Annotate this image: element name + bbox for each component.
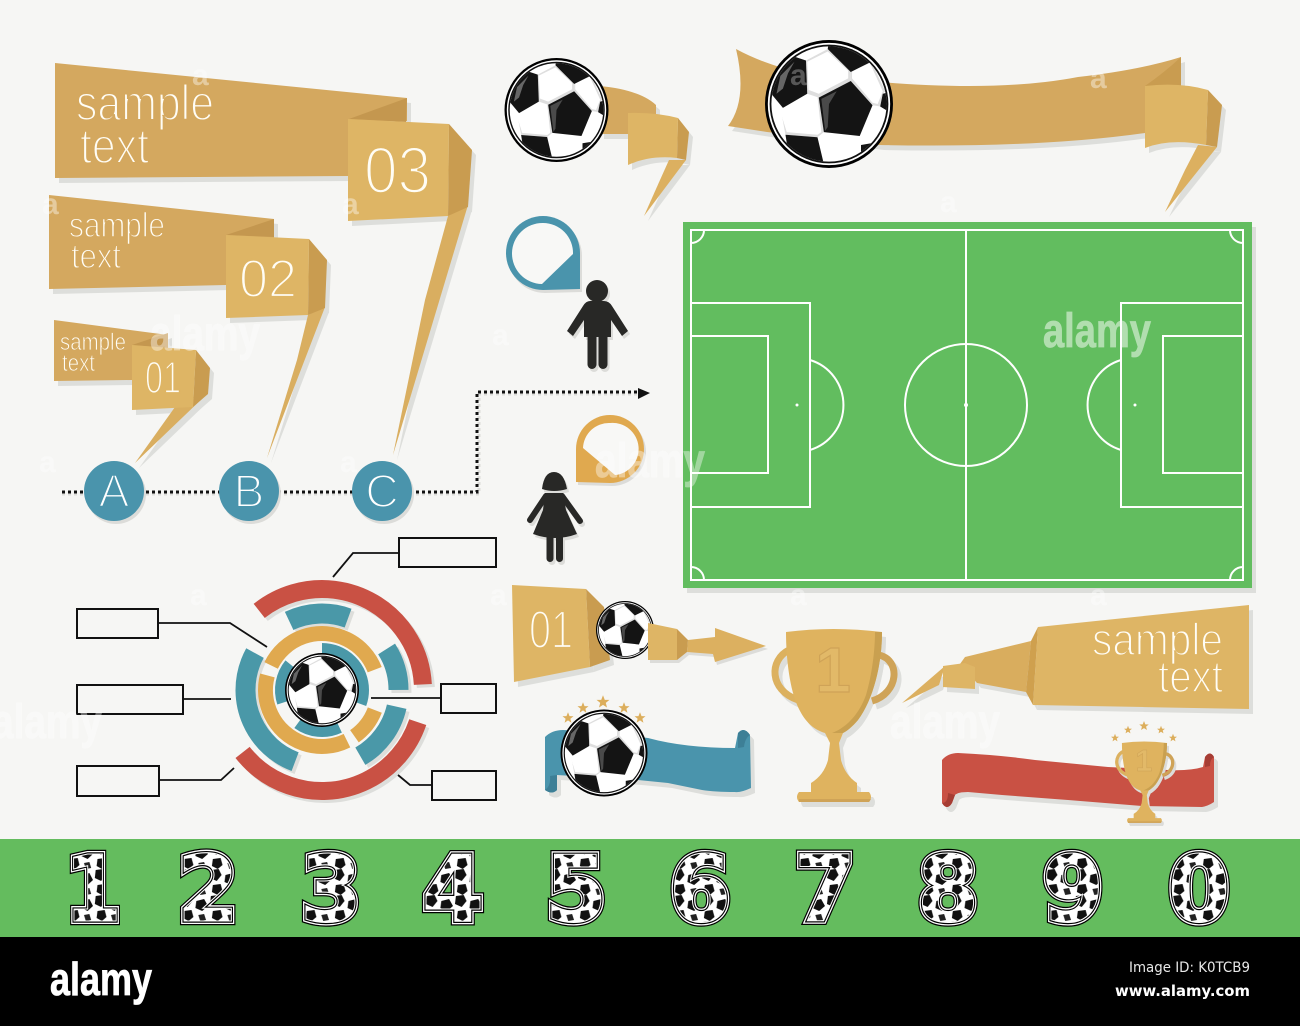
watermarks: alamy (1043, 305, 1151, 358)
digit 5: 5 (545, 837, 607, 943)
icon: soccer ball (560, 710, 648, 796)
timeline node C: C (365, 465, 399, 517)
icon: soccer ball (596, 601, 654, 659)
digit 8: 8 (917, 837, 979, 943)
digit 3: 3 (300, 837, 362, 943)
ribbon: red with trophy (942, 721, 1214, 823)
digit 4: 4 (422, 837, 484, 943)
text: sample text medium (69, 206, 165, 276)
banner: 02 sample text (49, 195, 327, 458)
banner: 03 sample text (55, 63, 472, 455)
digit 7: 7 (794, 837, 856, 943)
digit 1: 1 (64, 836, 122, 943)
timeline node A (84, 461, 144, 521)
callout box: left 2 (77, 685, 231, 714)
digit 2: 2 (177, 837, 239, 943)
watermarks: a (190, 579, 207, 612)
text: sample text right (1092, 614, 1223, 702)
callout box: right 1 (371, 684, 496, 713)
digit 2: 2 (177, 837, 239, 943)
footer logo: alamy (50, 953, 152, 1005)
digit 8: 8 (917, 837, 979, 943)
icon: male figure (567, 280, 628, 369)
digit 0: 0 (1168, 837, 1230, 943)
text: sample text large: sample (76, 75, 214, 131)
digit 9: 9 (1042, 837, 1104, 943)
pitch (683, 222, 1252, 588)
text: sample text small: sample (60, 329, 126, 356)
digit 1: 1 (64, 836, 122, 943)
pitch markings (691, 230, 1243, 580)
callout box: top right (333, 538, 496, 577)
icon: soccer ball (504, 58, 608, 162)
text: sample text small: text (62, 350, 95, 377)
timeline node B: B (234, 465, 264, 517)
text: sample text large: text (80, 118, 149, 174)
digit 4: 4 (422, 837, 484, 943)
inner teal arcs (267, 635, 377, 745)
digit 5: 5 (545, 837, 607, 943)
digit 4: 4 (422, 837, 484, 943)
arrow banner 01 (512, 585, 766, 682)
text: sample text medium: text (71, 237, 121, 276)
watermarks (0, 59, 1151, 749)
ribbon: blue with ball (545, 695, 751, 796)
banner: right sample text (902, 605, 1249, 709)
digit 6: 6 (669, 837, 731, 943)
watermarks: alamy (890, 696, 1000, 749)
icon: small trophy (1117, 742, 1173, 823)
digit 9: 9 (1042, 837, 1104, 943)
image id: Image ID: K0TCB9 (1129, 960, 1250, 976)
digit 4: 4 (422, 837, 484, 943)
watermarks: a (790, 59, 807, 92)
watermarks: a (342, 188, 359, 221)
digit 2: 2 (177, 837, 239, 943)
callout box: right 2 (398, 771, 496, 800)
dotted timeline arrow (62, 388, 650, 494)
digit 7: 7 (794, 837, 856, 943)
digit 3: 3 (300, 837, 362, 943)
text: sample text small (60, 329, 126, 377)
digit 7: 7 (794, 837, 856, 943)
watermarks: a (1090, 62, 1107, 95)
pin: orange (576, 415, 644, 483)
watermarks: a (940, 186, 957, 219)
digit 3: 3 (300, 837, 362, 943)
icon: soccer ball (765, 40, 893, 168)
number 03: 03 (364, 133, 431, 207)
text: sample text right: sample (1092, 614, 1223, 665)
watermarks: alamy (595, 435, 705, 488)
callout box: left 3 (77, 766, 234, 796)
watermarks: alamy (150, 308, 260, 361)
digit 5: 5 (545, 837, 607, 943)
text: sample text right: text (1158, 651, 1223, 702)
number 02: 02 (239, 249, 297, 309)
ring shadows (183, 551, 467, 835)
digit 0: 0 (1168, 837, 1230, 943)
orange arcs (246, 614, 398, 766)
digit 9: 9 (1042, 837, 1104, 943)
red arcs (180, 548, 464, 832)
digit 3: 3 (300, 837, 362, 943)
digit 0: 0 (1168, 837, 1230, 943)
watermarks: a (490, 579, 507, 612)
watermarks: a (492, 319, 509, 352)
callout box: left 1 (77, 609, 267, 647)
digit 8: 8 (917, 837, 979, 943)
digit 0: 0 (1168, 837, 1230, 943)
pin: blue (506, 216, 580, 290)
digit 9: 9 (1042, 837, 1104, 943)
banner: 01 sample text (54, 320, 210, 463)
watermarks: a (1090, 579, 1107, 612)
stars (1111, 721, 1177, 741)
watermarks: a (42, 188, 59, 221)
timeline node A: A (99, 465, 130, 517)
digit 6: 6 (669, 837, 731, 943)
timeline node C (352, 461, 412, 521)
text: sample text medium: sample (69, 206, 165, 245)
digit 5: 5 (545, 837, 607, 943)
digit 2: 2 (177, 837, 239, 943)
ribbon with ball: small (504, 58, 689, 216)
icon: female figure (530, 472, 580, 562)
number 01: 01 (145, 352, 181, 403)
teal arcs (217, 585, 427, 795)
digit 1: 1 (64, 836, 122, 943)
stars (562, 695, 646, 723)
digit 1: 1 (64, 836, 122, 943)
watermarks: a (192, 59, 209, 92)
footer bar (0, 937, 1300, 1026)
watermarks: a (340, 446, 357, 479)
number 01: 01 (529, 600, 573, 660)
digit 6: 6 (669, 837, 731, 943)
digit 8: 8 (917, 837, 979, 943)
number strip (0, 836, 1300, 943)
timeline node B (219, 461, 279, 521)
icon: soccer ball (285, 653, 359, 727)
website: www.alamy.com (1115, 982, 1250, 1000)
ring chart (180, 548, 467, 835)
watermarks: a (790, 579, 807, 612)
ribbon with ball: large (728, 40, 1222, 212)
watermarks: a (39, 446, 56, 479)
text: sample text large (76, 75, 214, 174)
trophy large (775, 629, 894, 802)
digit 6: 6 (669, 837, 731, 943)
digit 7: 7 (794, 837, 856, 943)
